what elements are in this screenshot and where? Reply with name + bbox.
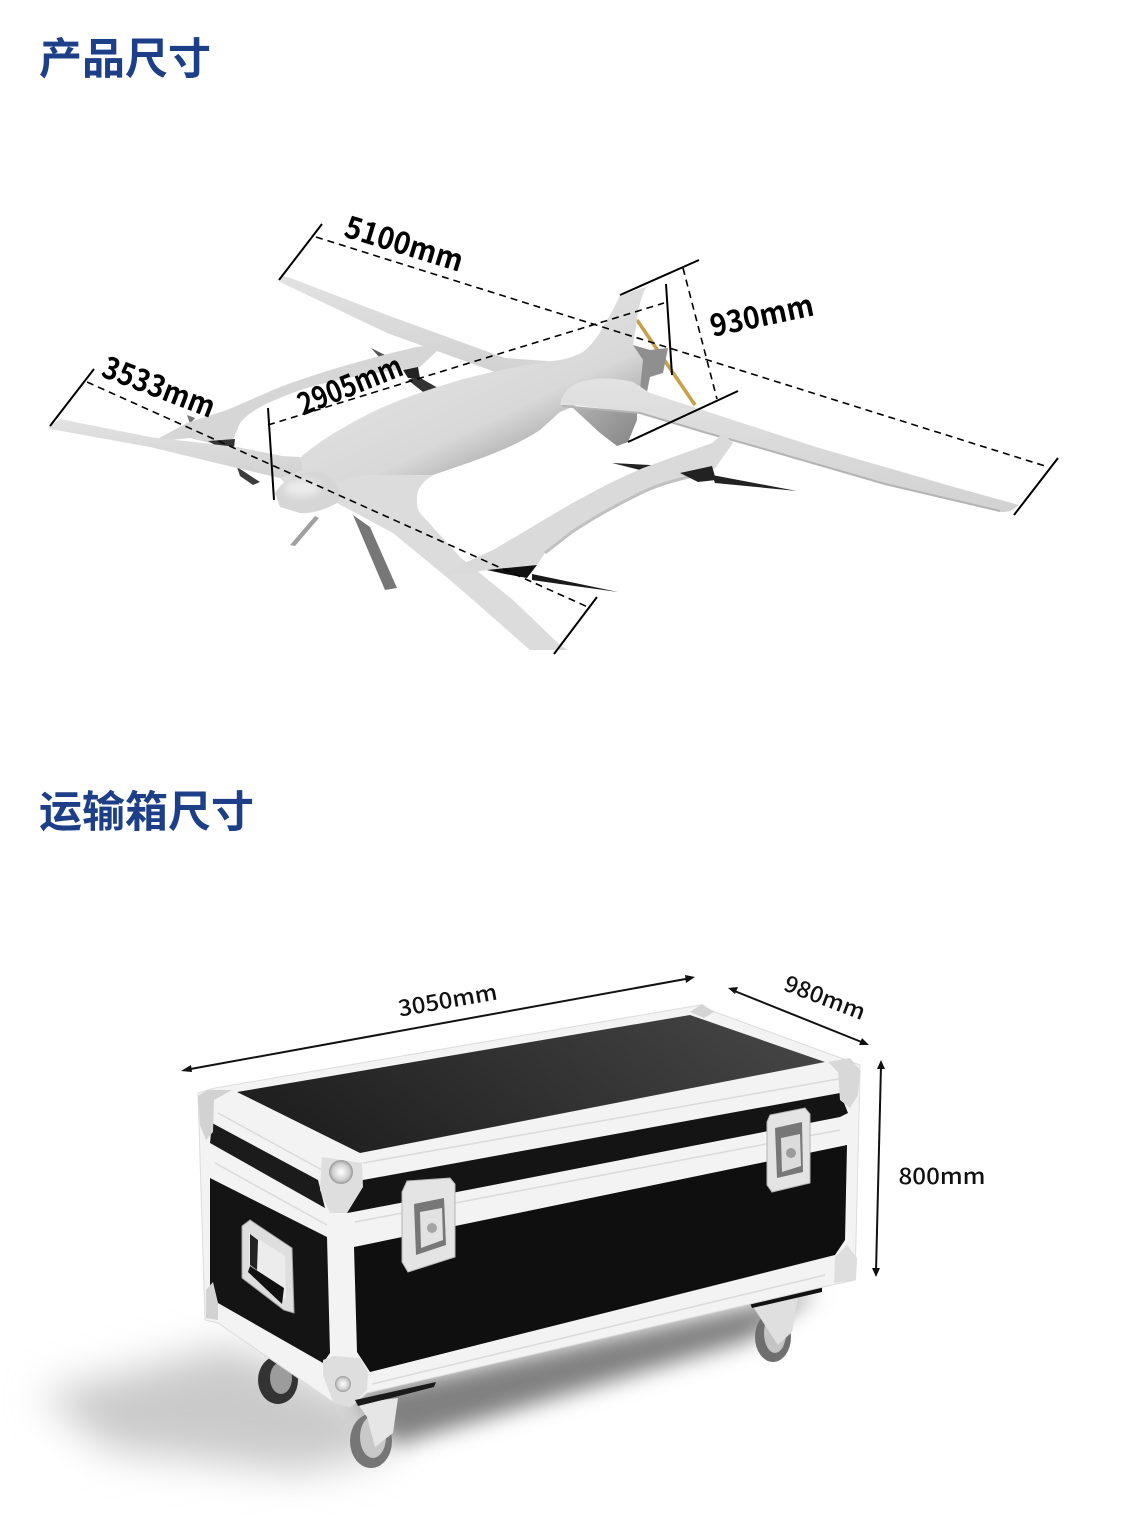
drone illustration	[48, 276, 1019, 650]
side handle	[242, 1220, 294, 1313]
dimension: 3050mm case length: 3050mm	[395, 975, 499, 1024]
rear left wheel	[258, 1356, 298, 1404]
left upper black strip	[210, 1123, 325, 1208]
dimension: 5100mm wingspan	[279, 203, 1058, 515]
far front wing	[48, 419, 303, 478]
near main wing	[560, 379, 1019, 512]
rear right wheel	[750, 1287, 822, 1362]
front main black panel	[354, 1145, 847, 1372]
dimension: 3533mm front wing	[50, 343, 597, 654]
nose highlight	[284, 480, 320, 496]
near boom rear motor	[680, 466, 716, 482]
ventral tail fin	[573, 408, 637, 446]
tail motor hub	[633, 345, 668, 392]
left main black panel	[210, 1178, 330, 1363]
dimension: 3533mm front wing: 3533mm	[97, 343, 223, 427]
near bottom corner plate	[323, 1356, 368, 1407]
soft left floor shadow	[40, 1345, 395, 1472]
top left corner plate	[198, 1090, 232, 1140]
rail shading lines	[215, 1079, 840, 1384]
near tail boom	[445, 433, 733, 576]
bottom left corner plate	[206, 1282, 218, 1320]
case lid top panel	[237, 1015, 825, 1153]
dimension: 3050mm case length	[181, 975, 695, 1072]
top right corner plate	[828, 1058, 860, 1108]
far main wing	[280, 276, 560, 373]
dimension: 980mm case width	[728, 966, 871, 1045]
front upper black strip	[347, 1093, 848, 1213]
near top corner plate	[320, 1157, 363, 1213]
dimension: 800mm case height: 800mm	[898, 1159, 986, 1191]
near boom front motor	[487, 565, 537, 578]
dimension: 980mm case width: 980mm	[780, 966, 871, 1027]
dimension: 5100mm wingspan: 5100mm	[340, 203, 470, 280]
dimension: 2905mm length	[268, 284, 672, 500]
heading: transport case dimensions: 运输箱尺寸	[39, 789, 254, 837]
far tail boom	[152, 345, 438, 443]
dimension: 930mm height	[620, 260, 817, 442]
bottom right corner plate	[834, 1245, 857, 1283]
left latch	[402, 1178, 455, 1272]
nose	[275, 472, 340, 513]
near front wing	[327, 475, 568, 650]
near main wing trailing shade	[562, 406, 1000, 511]
case silhouette	[198, 1005, 860, 1407]
heading: product dimensions: 产品尺寸	[39, 36, 211, 84]
right latch	[767, 1108, 810, 1192]
far wing motor	[403, 367, 420, 378]
far boom motor	[208, 439, 235, 448]
dimension: 800mm case height	[872, 1060, 986, 1277]
front wheel	[350, 1382, 436, 1468]
dimension: 930mm height: 930mm	[705, 281, 817, 346]
transport case illustration	[40, 1004, 860, 1472]
fuselage	[280, 287, 646, 500]
dimension: 2905mm length: 2905mm	[290, 342, 408, 424]
near boom underside shade	[545, 473, 709, 553]
icon: drone propeller blades and landing fins	[187, 320, 797, 592]
contact floor shadow	[350, 1290, 820, 1445]
far top corner	[690, 1004, 714, 1018]
